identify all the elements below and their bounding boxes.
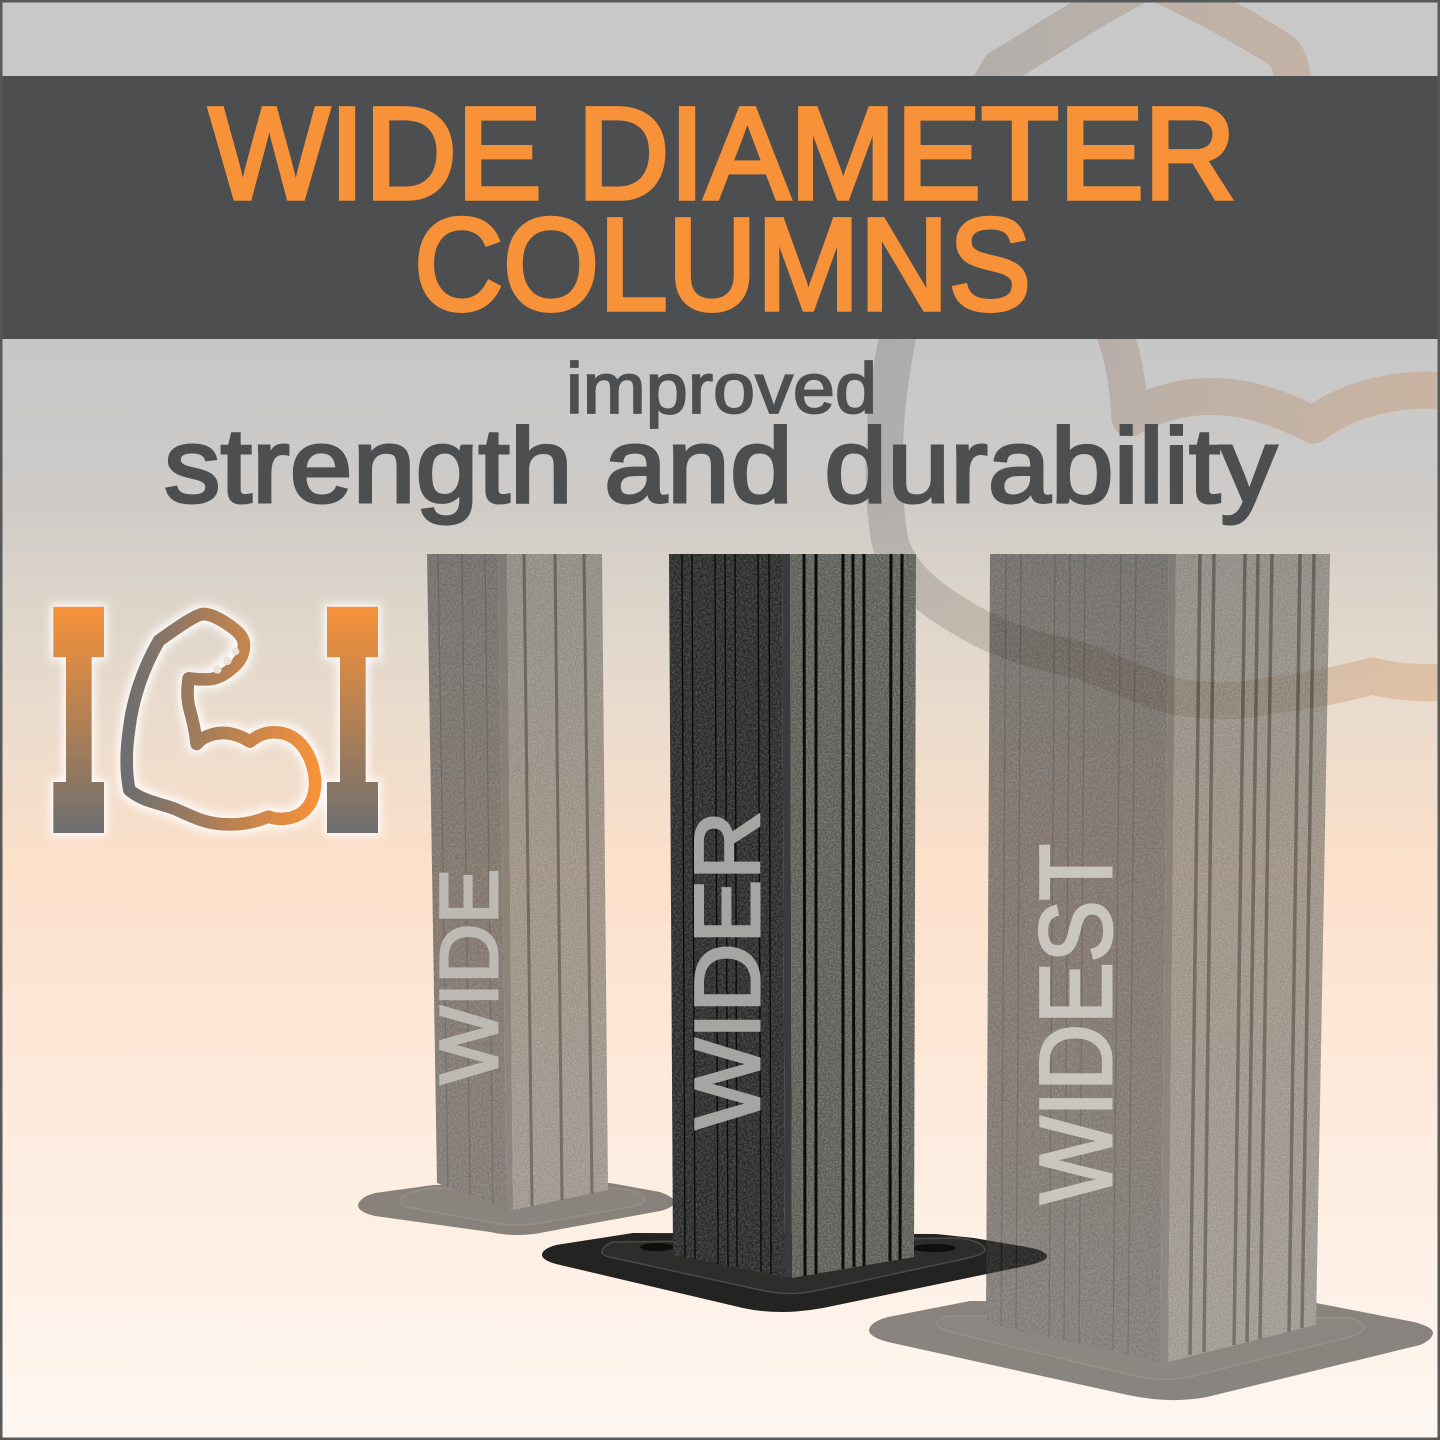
subtitle bbox=[164, 350, 1277, 525]
column: wide bbox=[358, 554, 675, 1235]
corner band: wide bbox=[498, 554, 513, 1210]
column: wider bbox=[542, 554, 1047, 1312]
mounting slots: wider bbox=[640, 1243, 956, 1252]
subtitle: improved: improved bbox=[566, 350, 877, 429]
right face: widest bbox=[1168, 554, 1330, 1362]
ribs: wide bbox=[438, 554, 592, 1206]
raised plate: wide bbox=[400, 1188, 645, 1225]
right face: wider bbox=[790, 554, 916, 1278]
left face: wide bbox=[427, 554, 507, 1210]
left face: wider bbox=[669, 554, 785, 1277]
column: widest bbox=[869, 554, 1433, 1400]
raised plate: widest bbox=[937, 1316, 1364, 1379]
raised plate: wider bbox=[602, 1238, 985, 1294]
label: WIDEST: WIDEST bbox=[1019, 844, 1133, 1204]
ribs: widest bbox=[1001, 554, 1314, 1355]
watermark: flexed arm outline bbox=[884, 0, 1440, 701]
title: line 1: WIDE DIAMETER bbox=[209, 80, 1236, 226]
icon: arm outline bbox=[127, 614, 315, 824]
corner band: wider bbox=[782, 554, 792, 1278]
corner band: widest bbox=[1160, 554, 1176, 1362]
base plate: wider bbox=[542, 1233, 1047, 1312]
icon: left dumbbell bbox=[53, 607, 104, 833]
label: WIDER: WIDER bbox=[677, 811, 779, 1129]
label: WIDE: WIDE bbox=[424, 869, 515, 1084]
icon: finger notches bbox=[213, 647, 239, 674]
subtitle: strength and durability: strength and durability bbox=[164, 407, 1277, 525]
base plate: widest bbox=[869, 1301, 1433, 1400]
ribs: wider bbox=[682, 554, 902, 1276]
icon: flexed arm between dumbbells bbox=[53, 607, 378, 833]
base plate: wide bbox=[358, 1183, 675, 1235]
title band bbox=[0, 76, 1440, 339]
icon: right dumbbell bbox=[327, 607, 378, 833]
right face: wide bbox=[507, 554, 608, 1210]
title: line 2: COLUMNS bbox=[414, 190, 1031, 338]
left face: widest bbox=[986, 554, 1169, 1362]
